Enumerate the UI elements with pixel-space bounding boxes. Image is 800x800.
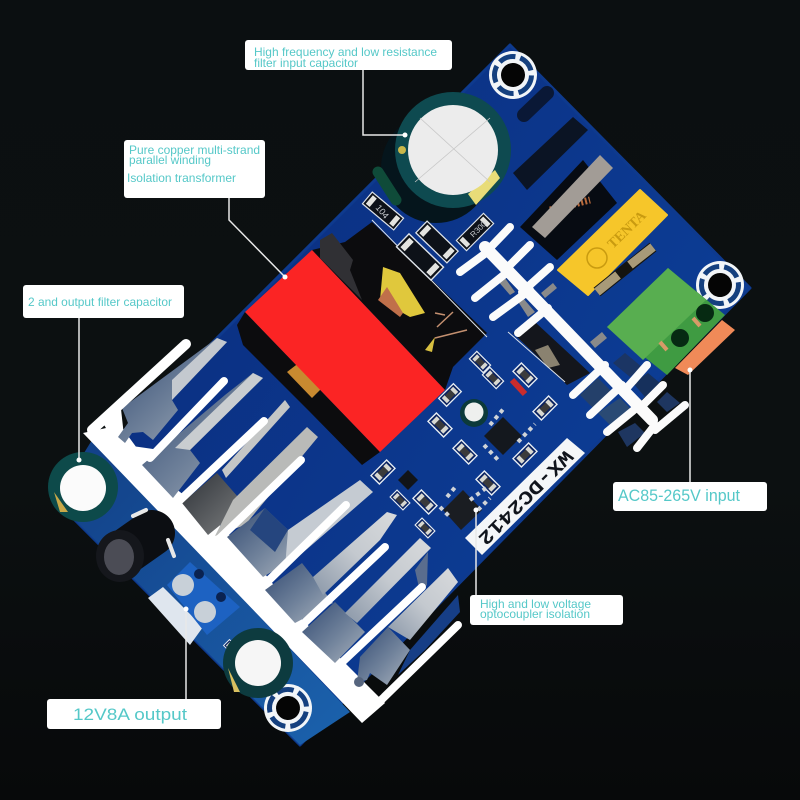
large resistors: 104 bbox=[374, 203, 391, 221]
callout: output filter capacitor: 2 and output filter capacitor bbox=[28, 295, 172, 309]
transistor bbox=[508, 322, 590, 385]
model silk strip bbox=[465, 438, 585, 555]
mounting hole bottom bbox=[255, 675, 321, 741]
mounting hole top bbox=[482, 44, 544, 106]
callout: optocoupler: optocoupler isolation bbox=[480, 607, 590, 621]
heat sink white bars bbox=[92, 344, 458, 706]
callout: optocoupler bbox=[470, 508, 623, 625]
callout: output bbox=[47, 606, 221, 729]
callout: input voltage bbox=[613, 368, 767, 511]
heat sink fin 2 bbox=[142, 373, 263, 498]
model silk strip: WX-DC2412 bbox=[473, 445, 577, 549]
dark block component bbox=[513, 117, 588, 190]
heat sink fin 6 bbox=[302, 538, 431, 663]
transformer body bbox=[237, 220, 487, 465]
black inductor bbox=[96, 510, 174, 582]
circuit board bbox=[48, 44, 750, 745]
mounting hole right bbox=[692, 257, 748, 313]
large resistors: R300 bbox=[468, 219, 489, 239]
red cover rectangle bbox=[245, 250, 445, 452]
heat sink fin 3 bbox=[182, 400, 318, 536]
output screw terminal bbox=[148, 562, 240, 645]
callout: input capacitor: High frequency and low resistance bbox=[254, 45, 437, 59]
heat sink fin 4 bbox=[227, 480, 373, 577]
right heat sink dark fins bbox=[497, 278, 680, 447]
small electrolytic capacitor bbox=[460, 399, 488, 427]
callout: transformer: Isolation transformer bbox=[127, 171, 236, 185]
board substrate bbox=[55, 45, 750, 745]
inductor bbox=[520, 155, 617, 260]
yellow safety capacitor bbox=[558, 190, 667, 295]
output strip of board bbox=[55, 440, 350, 745]
callout: transformer: Pure copper multi-strand bbox=[129, 143, 260, 157]
bottom output capacitor bbox=[223, 628, 293, 698]
dark capsule component bbox=[524, 93, 547, 115]
yellow safety capacitor: TENTA bbox=[605, 208, 650, 252]
callout: transformer: parallel winding bbox=[129, 153, 211, 167]
callout: output filter capacitor bbox=[23, 285, 184, 462]
control chips bbox=[398, 407, 535, 530]
diode bbox=[512, 380, 525, 394]
heat sink fin 1 bbox=[118, 338, 227, 443]
input filter capacitor bbox=[381, 92, 511, 223]
small green capacitor bbox=[378, 172, 396, 200]
callout: input capacitor: filter input capacitor bbox=[254, 56, 358, 70]
input terminal bbox=[607, 268, 735, 375]
callout: input capacitor bbox=[245, 40, 452, 138]
fuse bbox=[597, 247, 653, 292]
heat sink fin 5 bbox=[265, 512, 397, 623]
callout: output: 12V8A output bbox=[73, 705, 187, 724]
heat sink fin 7 bbox=[354, 568, 460, 687]
right heat sink white bars bbox=[460, 227, 685, 448]
callout: transformer bbox=[124, 140, 288, 280]
output side capacitor bbox=[48, 452, 118, 522]
large resistors bbox=[362, 192, 494, 280]
callout: input voltage: AC85-265V input bbox=[618, 486, 740, 505]
small resistor pads bbox=[224, 351, 557, 656]
callout: optocoupler: High and low voltage bbox=[480, 597, 591, 611]
heat sink white rail bbox=[83, 400, 385, 723]
